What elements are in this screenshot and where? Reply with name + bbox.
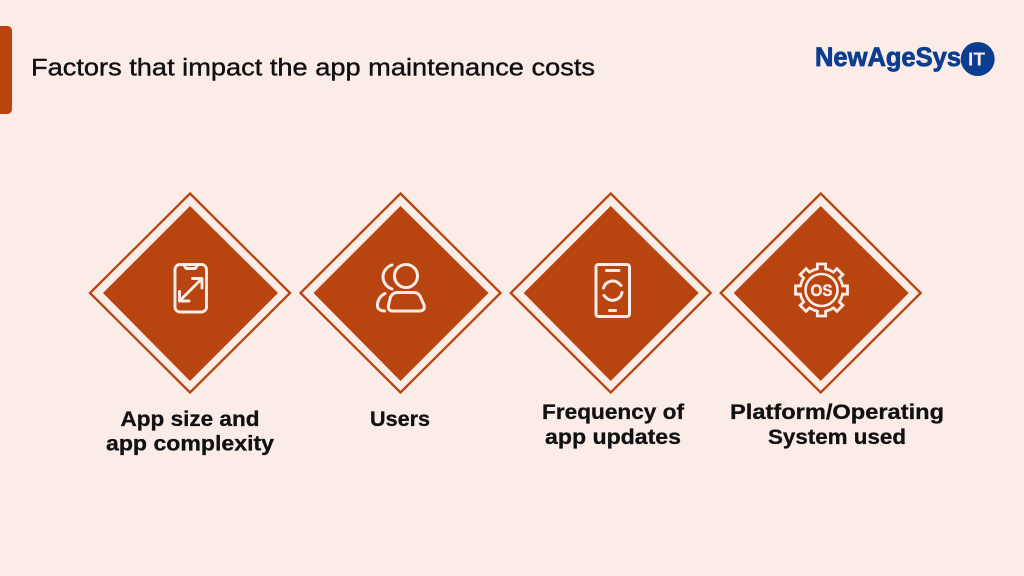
factor 2: users [300,194,500,431]
diamond 3 [511,194,711,392]
icon: users [377,264,424,311]
logo: NewAgeSys IT: NewAgeSys [815,42,961,72]
icon: phone with resize arrow [175,264,206,312]
label: app size and complexity [106,407,274,456]
label: platform operating system used: System used [768,425,906,449]
label: platform operating system used: Platform/Operating [730,400,944,424]
accent bar [0,26,12,114]
diamond 2 [300,194,500,392]
diamond 4 [721,194,921,392]
factor 3: frequency of updates [511,194,711,449]
icon: OS gear: OS [810,282,832,300]
diamond 1 [90,194,290,392]
icon: OS gear [796,264,848,316]
label: app size and complexity: app complexity [106,432,274,456]
logo: NewAgeSys IT: IT [968,50,985,70]
icon: phone with refresh arrows [596,264,630,316]
label: users: Users [370,407,430,431]
title: Factors that impact the app maintenance costs [31,54,595,82]
label: frequency of app updates [542,400,685,449]
label: frequency of app updates: app updates [545,425,681,449]
label: frequency of app updates: Frequency of [542,400,685,424]
label: app size and complexity: App size and [120,407,260,431]
factor 4: platform / operating system [721,194,944,449]
label: platform operating system used [730,400,944,449]
factor 1: app size and complexity [90,194,290,456]
